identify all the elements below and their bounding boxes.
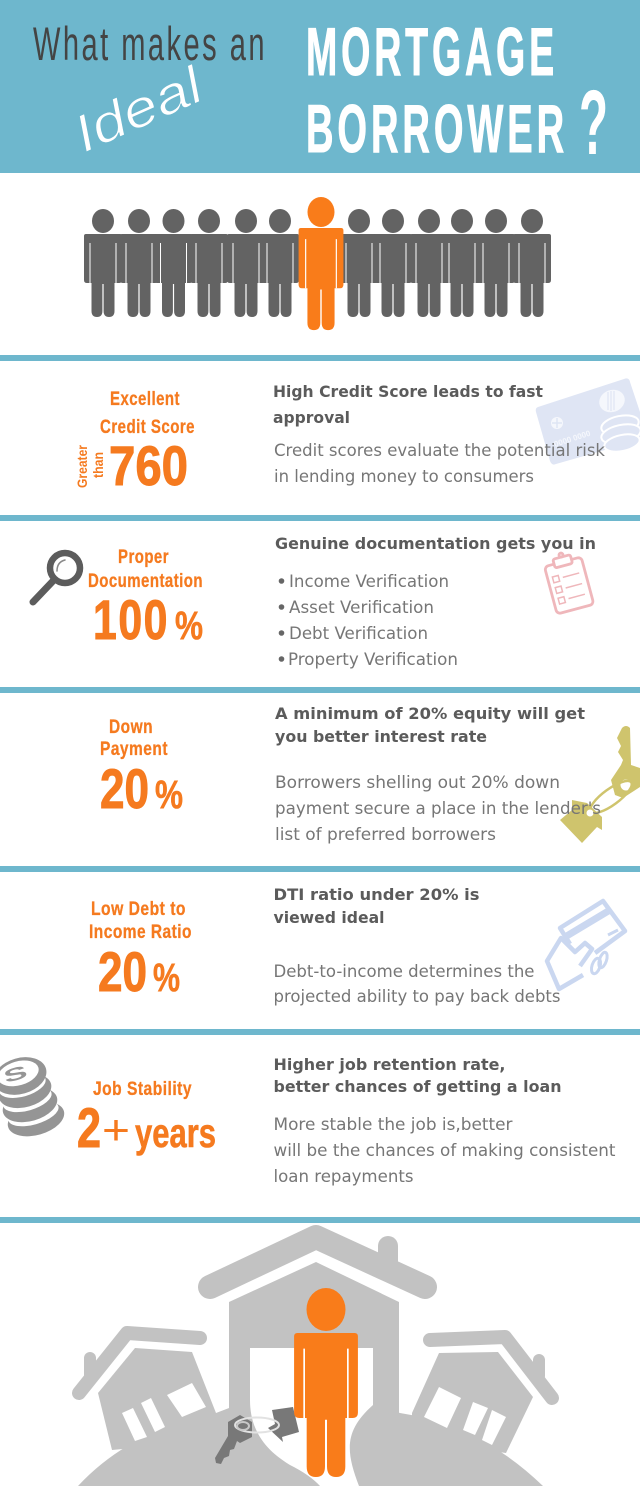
stat: 2+ years xyxy=(77,1096,216,1159)
panel: job stability: loan repayments xyxy=(274,1167,414,1187)
header banner xyxy=(0,0,640,174)
verification list: Debt Verification xyxy=(289,624,428,644)
icon: magnifying glass xyxy=(33,553,80,602)
panel: debt to income: Income Ratio xyxy=(89,922,192,943)
panel: down payment xyxy=(100,704,640,845)
panel: down payment: payment secure a place in the lender's xyxy=(275,799,601,819)
stat: 20%: % xyxy=(155,773,183,817)
hills xyxy=(78,1400,543,1486)
panel: down payment: list of preferred borrowers xyxy=(275,825,496,845)
body: More stable the job is,better xyxy=(274,1115,513,1135)
heading: High Credit Score leads to fast xyxy=(273,382,543,401)
label: Low Debt to xyxy=(91,899,186,920)
icon: hand holding card xyxy=(547,901,625,989)
stat: 20%: 20 xyxy=(100,757,149,820)
label: Down xyxy=(109,717,153,738)
label: Proper xyxy=(118,547,169,568)
illustration: houses, person and keys xyxy=(78,1237,552,1486)
heading: DTI ratio under 20% is xyxy=(274,885,480,904)
panel: debt to income: projected ability to pay back debts xyxy=(274,987,561,1007)
body: Credit scores evaluate the potential risk xyxy=(274,441,605,461)
stat: 100%: % xyxy=(175,604,203,648)
heading: Genuine documentation gets you in xyxy=(275,534,596,553)
title: what makes an: What makes an xyxy=(33,17,267,70)
house windows xyxy=(122,1383,506,1445)
stat: 100%: 100 xyxy=(93,588,169,651)
heading: Higher job retention rate, xyxy=(274,1055,506,1074)
panel: credit score: Credit Score xyxy=(100,417,195,438)
keys with house tag xyxy=(215,1407,299,1464)
orange person holding keys xyxy=(294,1288,358,1477)
panel: job stability: will be the chances of making consistent xyxy=(274,1141,616,1161)
icon: credit card and coins: 0000 0000 xyxy=(553,428,592,449)
title: question mark: ? xyxy=(579,72,608,174)
verification list: Income Verification xyxy=(289,572,449,592)
heading: A minimum of 20% equity will get xyxy=(275,704,585,723)
right house xyxy=(412,1337,552,1453)
panel: documentation xyxy=(33,534,596,670)
icon: coin stack: S xyxy=(1,1061,29,1087)
panel: debt to income: viewed ideal xyxy=(274,908,384,927)
label: Excellent xyxy=(110,389,180,410)
panel: job stability xyxy=(0,1051,616,1187)
panel: documentation: Documentation xyxy=(88,571,203,592)
stat: 2+ years: years xyxy=(135,1110,216,1156)
panel: credit score: approval xyxy=(273,408,350,427)
icon: coin stack xyxy=(0,1051,68,1142)
verification list xyxy=(279,572,458,670)
icon: credit card and coins xyxy=(536,378,640,465)
stat: 2+ years: + xyxy=(102,1106,130,1153)
large house xyxy=(210,1237,425,1415)
icon: gold key and house tag xyxy=(560,726,640,843)
greater than rotated xyxy=(74,445,106,488)
stat: 20%: % xyxy=(153,956,180,1000)
body: Borrowers shelling out 20% down xyxy=(275,773,560,793)
icon: clipboard xyxy=(542,548,594,614)
panel: job stability: better chances of getting a loan xyxy=(274,1077,562,1096)
verification list: Asset Verification xyxy=(289,598,434,618)
panel: down payment: Payment xyxy=(100,739,168,760)
orange figure xyxy=(299,197,343,330)
label: Job Stability xyxy=(93,1079,192,1100)
row of people with one orange figure xyxy=(84,197,551,330)
panel: debt to income xyxy=(89,885,625,1007)
left house xyxy=(79,1333,216,1450)
divider bars xyxy=(0,355,640,1223)
panel: credit score xyxy=(74,378,640,497)
body: Debt-to-income determines the xyxy=(274,962,534,982)
greater than rotated: than xyxy=(90,452,106,478)
stat: 2+ years: 2 xyxy=(77,1096,101,1159)
stat: 760: 760 xyxy=(109,434,188,497)
panel: credit score: in lending money to consumers xyxy=(274,467,534,487)
greater than rotated: Greater xyxy=(74,445,90,488)
panel: down payment: you better interest rate xyxy=(275,727,487,746)
verification list: Property Verification xyxy=(288,650,458,670)
stat: 20%: 20 xyxy=(98,940,147,1003)
title: ideal script: Ideal xyxy=(65,56,213,164)
